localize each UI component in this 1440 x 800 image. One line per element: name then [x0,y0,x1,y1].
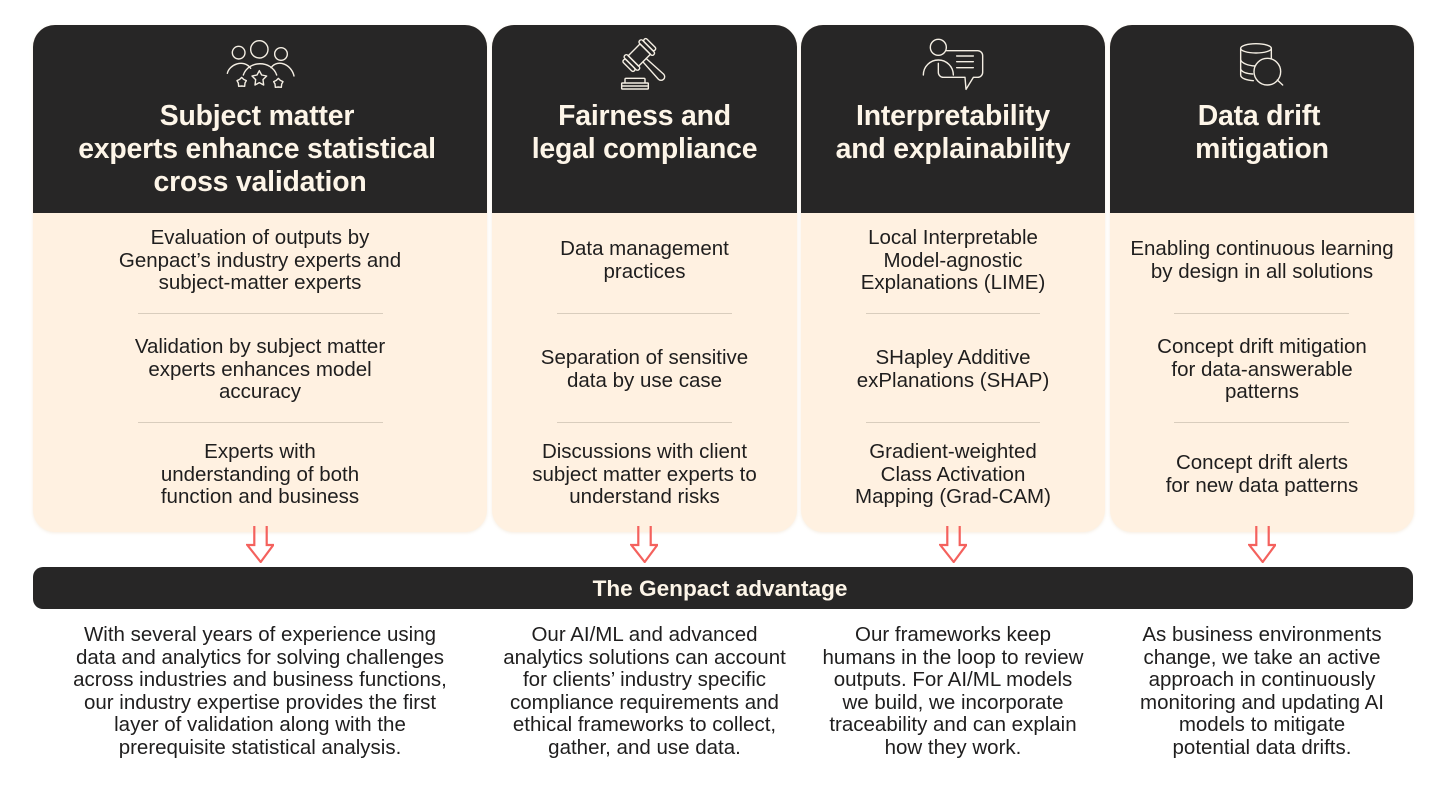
text: separation: Separation of sensitive [541,346,748,369]
heading: Fairness and [558,100,731,132]
heading: experts enhance statistical [78,133,436,165]
text: evaluation of outputs: Evaluation of outputs by [151,226,369,249]
text: LIME: Explanations (LIME) [861,271,1045,294]
text: discussions [532,440,757,508]
text: advantage 2: analytics solutions can account [503,646,786,668]
heading [836,100,1070,165]
text: advantage 1: data and analytics for solving challenges [76,646,444,668]
header: subject matter experts [33,25,487,213]
header: fairness [492,25,797,213]
text: experts with understanding: Experts with [204,440,316,463]
text: concept drift mitigation: for data-answerable [1171,358,1353,380]
heading: Interpretability [856,100,1050,132]
icon: database with magnifier [1240,43,1284,86]
header: interpretability [801,25,1105,213]
banner: the Genpact advantage [33,567,1413,609]
text: advantage 4: approach in continuously [1149,668,1375,691]
text: validation: accuracy [219,380,301,403]
text: advantage 4: models to mitigate [1179,713,1345,736]
text: advantage 1: layer of validation along with the [114,713,406,736]
text: concept drift alerts [1166,451,1358,496]
text: evaluation of outputs: Genpact’s industry experts and [119,248,401,272]
icon: people with stars [226,40,295,88]
text: LIME: Model-agnostic [883,248,1022,272]
banner: the Genpact advantage: The Genpact advantage [593,576,847,601]
text: continuous learning: Enabling continuous learning [1130,237,1394,260]
heading: Data drift [1198,100,1320,132]
text: advantage 2 [503,623,786,758]
text: separation: data by use case [567,368,722,392]
text: concept drift mitigation: Concept drift mitigation [1157,335,1367,358]
text: advantage 3: we build, we incorporate [842,690,1064,714]
text: advantage 1: With several years of experience using [84,623,436,646]
text: advantage 1: prerequisite statistical analysis. [119,736,401,758]
arrow 4 [1248,526,1276,563]
text: Grad-CAM: Mapping (Grad-CAM) [855,485,1051,508]
text: advantage 2: compliance requirements and [510,690,779,714]
panel: data drift mitigation [1110,25,1414,532]
text: evaluation of outputs: subject-matter experts [159,271,361,294]
heading: and explainability [836,133,1070,165]
text: advantage 2: ethical frameworks to collect, [513,713,776,736]
text: SHAP [857,346,1049,392]
text: discussions: subject matter experts to [532,462,757,486]
heading: mitigation [1195,133,1329,165]
panel: subject matter experts [33,25,487,532]
text: advantage 2: for clients’ industry specific [523,668,766,691]
text: discussions: understand risks [569,485,720,508]
text: data management: practices [603,260,686,282]
text: concept drift mitigation [1157,335,1367,403]
text: advantage 3: traceability and can explain [829,713,1077,736]
text: concept drift mitigation: patterns [1225,380,1299,403]
text: LIME [861,226,1045,294]
text: advantage 3: humans in the loop to review [823,646,1083,668]
heading: legal compliance [532,133,757,165]
text: SHAP: exPlanations (SHAP) [857,368,1049,392]
text: validation: experts enhances model [148,358,372,380]
icon: gavel [620,38,666,90]
text: advantage 3 [823,623,1084,758]
text: discussions: Discussions with client [542,440,747,463]
text: validation: Validation by subject matter [135,335,385,358]
text: advantage 3: how they work. [885,736,1021,758]
text: concept drift alerts: Concept drift alerts [1176,451,1348,474]
text: experts with understanding [161,440,359,508]
text: Grad-CAM [855,440,1051,508]
text: advantage 3: outputs. For AI/ML models [834,668,1072,691]
arrow 1 [246,526,274,563]
text: validation [135,335,385,403]
text: LIME: Local Interpretable [868,226,1038,249]
text: advantage 4: As business environments [1142,623,1382,646]
text: evaluation of outputs [119,226,401,294]
panel: interpretability and explainability [801,25,1105,532]
heading: Subject matter [160,100,354,132]
text: data management: Data management [560,237,729,260]
text: advantage 4: monitoring and updating AI [1140,690,1384,714]
text: continuous learning [1130,237,1394,282]
header: data drift [1110,25,1414,213]
text: advantage 2: gather, and use data. [548,736,741,758]
heading [78,100,436,198]
panel: fairness and legal compliance [492,25,797,532]
text: advantage 4: change, we take an active [1143,646,1381,668]
text: data management [560,237,729,282]
text: concept drift alerts: for new data patterns [1166,474,1358,496]
text: advantage 3: Our frameworks keep [855,623,1051,646]
arrow 3 [939,526,967,563]
text: advantage 1: across industries and business functions, [73,668,447,691]
text: separation [541,346,748,392]
text: SHAP: SHapley Additive [876,346,1030,369]
heading: cross validation [154,166,366,198]
text: advantage 2: Our AI/ML and advanced [531,623,758,646]
heading [1195,100,1329,165]
arrow 2 [630,526,658,563]
text: continuous learning: by design in all solutions [1151,260,1373,282]
heading [532,100,757,165]
text: advantage 1 [73,623,447,758]
text: advantage 4: potential data drifts. [1173,736,1351,758]
text: advantage 4 [1140,623,1384,758]
text: Grad-CAM: Gradient-weighted [869,440,1037,463]
icon: presenter with speech bubble [922,38,984,90]
text: experts with understanding: understanding of both [161,462,359,486]
text: Grad-CAM: Class Activation [881,462,1025,486]
text: advantage 1: our industry expertise provides the first [84,690,436,714]
text: experts with understanding: function and business [161,485,359,508]
